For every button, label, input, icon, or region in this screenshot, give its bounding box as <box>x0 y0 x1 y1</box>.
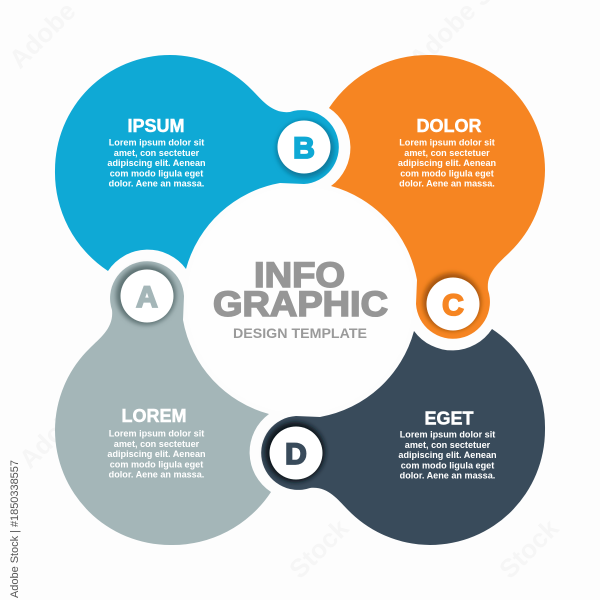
text: IPSUM: amet, con sectetuer <box>114 148 200 158</box>
badge D <box>265 422 325 482</box>
text: EGET: adipiscing elit. Aenean <box>398 450 497 460</box>
text: DOLOR: DOLOR <box>416 116 482 136</box>
text: LOREM: amet, con sectetuer <box>114 439 200 449</box>
badge C <box>423 273 481 331</box>
text: EGET: Lorem ipsum dolor sit <box>400 430 495 440</box>
text: IPSUM: Lorem ipsum dolor sit <box>109 138 204 148</box>
panel: LOREM gray <box>55 261 271 545</box>
text: LOREM: LOREM <box>122 406 186 426</box>
text: DOLOR: Lorem ipsum dolor sit <box>399 138 495 148</box>
badge D: D <box>285 438 307 471</box>
text: EGET: dolor. Aene an massa. <box>400 470 495 480</box>
panel: EGET dark <box>261 329 545 545</box>
title: INFO GRAPHIC: INFO <box>254 256 345 295</box>
text: DOLOR: amet, con sectetuer <box>404 148 490 158</box>
badge A <box>116 265 176 325</box>
text: LOREM: adipiscing elit. Aenean <box>107 449 206 459</box>
text: LOREM: com modo ligula eget <box>110 459 203 469</box>
text: IPSUM: com modo ligula eget <box>110 168 203 178</box>
text: EGET: EGET <box>424 408 474 428</box>
badge B <box>276 120 334 178</box>
text: IPSUM <box>107 116 206 188</box>
text: DOLOR: dolor. Aene an massa. <box>399 178 495 188</box>
text: DOLOR: adipiscing elit. Aenean <box>398 158 496 168</box>
text: LOREM: dolor. Aene an massa. <box>109 470 204 480</box>
text: IPSUM: IPSUM <box>127 116 185 136</box>
text: EGET: com modo ligula eget <box>401 460 494 470</box>
text: DOLOR <box>398 116 496 188</box>
text: LOREM: Lorem ipsum dolor sit <box>109 428 204 438</box>
title: INFO GRAPHIC <box>213 256 388 324</box>
panel: IPSUM blue <box>55 55 339 271</box>
text: EGET: amet, con sectetuer <box>405 440 491 450</box>
text: LOREM <box>107 406 206 480</box>
badge B: B <box>293 132 315 165</box>
badge C: C <box>442 289 464 322</box>
text: DOLOR: com modo ligula eget <box>400 168 494 178</box>
watermark: Stock <box>283 513 355 584</box>
watermark: Stock <box>493 513 565 584</box>
badge A: A <box>136 281 158 314</box>
watermark: Adobe Stock <box>13 340 147 474</box>
title: INFO GRAPHIC: GRAPHIC <box>213 285 388 324</box>
text: IPSUM: dolor. Aene an massa. <box>109 178 204 188</box>
stock id vertical text: Adobe Stock | #1850338557 <box>9 460 21 598</box>
center circle <box>187 187 413 413</box>
text: IPSUM: adipiscing elit. Aenean <box>107 158 206 168</box>
panel: DOLOR orange <box>329 55 545 339</box>
text: EGET <box>398 408 497 480</box>
subtitle: DESIGN TEMPLATE <box>233 326 367 341</box>
